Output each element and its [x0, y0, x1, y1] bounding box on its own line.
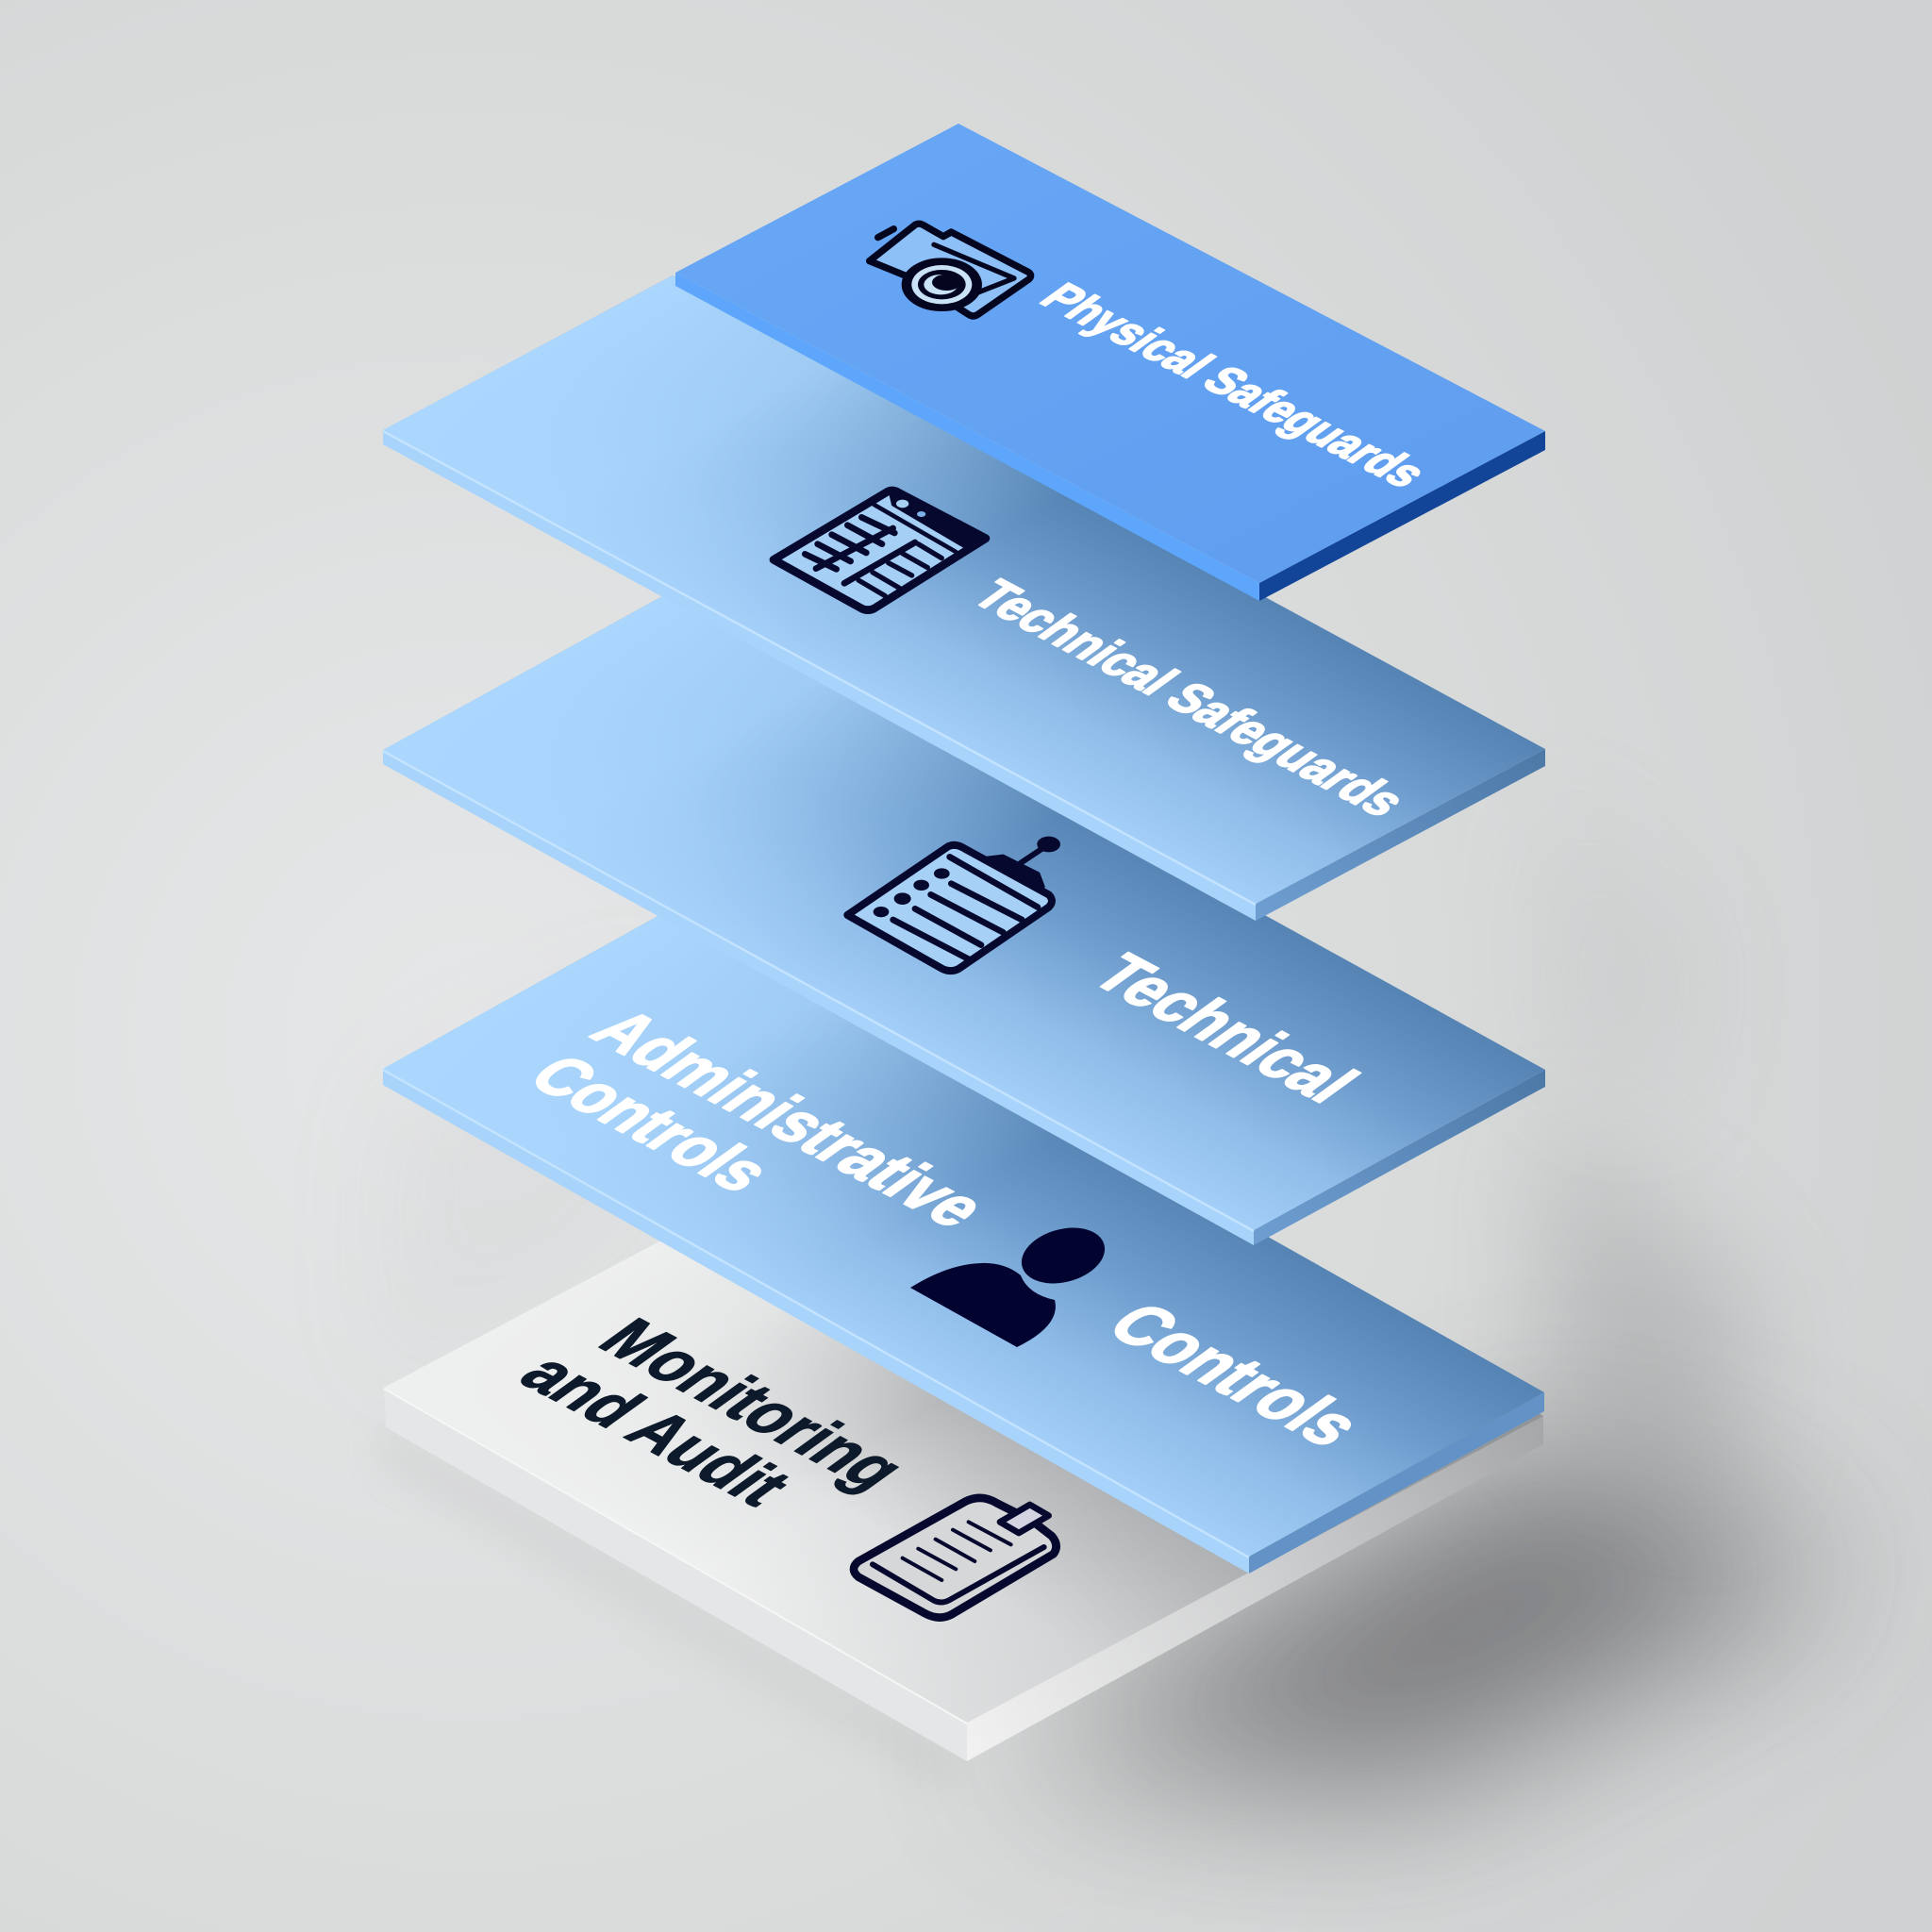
slab right side [1249, 1392, 1544, 1574]
slab edge highlight [383, 751, 1254, 1231]
layer: Administrative Controls [383, 905, 1544, 1574]
controls label right: Controls [1091, 1291, 1379, 1457]
slab right side [967, 1415, 1543, 1761]
slab left side [675, 273, 1259, 601]
slab left side [383, 430, 1256, 921]
slab top left light [383, 275, 1545, 904]
slab top left light [384, 1081, 1543, 1723]
slab edge highlight [383, 431, 1256, 905]
layer: Technical [383, 590, 1545, 1245]
slab left side [383, 750, 1254, 1245]
layer: Monitoring and Audit [384, 1081, 1543, 1761]
slab top left light [383, 590, 1545, 1230]
slab top face [675, 124, 1545, 583]
slab top face [383, 590, 1545, 1230]
cast shadow of stack [377, 783, 1849, 1792]
slab right side [1259, 431, 1545, 601]
slab top face [383, 275, 1545, 904]
icon: browser window with grid [774, 491, 987, 610]
audit label: and Audit [504, 1342, 808, 1517]
icon: server with antenna [847, 838, 1059, 971]
slab right side [1256, 749, 1545, 921]
slab left side [384, 1388, 967, 1761]
slab top face [384, 1081, 1543, 1723]
icon: clipboard [854, 1498, 1057, 1618]
layer: Technical Safeguards [383, 275, 1545, 921]
slab top left light [383, 905, 1544, 1557]
icon: person [910, 1219, 1111, 1347]
technical label: Technical [1076, 943, 1374, 1113]
monitoring label: Monitoring [583, 1307, 924, 1501]
slab left side [383, 1069, 1249, 1574]
slab top face [383, 905, 1544, 1557]
slab top right shade [384, 1081, 1543, 1723]
slab front edge highlight [384, 1389, 967, 1724]
icon: camera [870, 224, 1031, 316]
technical safeguards label: Technical Safeguards [959, 572, 1420, 825]
controls label left: Controls [513, 1044, 789, 1203]
physical safeguards label: Physical Safeguards [1028, 276, 1439, 495]
slab edge highlight [383, 1070, 1249, 1557]
administrative label: Administrative [575, 998, 1005, 1239]
layer: Physical Safeguards [675, 124, 1545, 601]
slab right side [1254, 1070, 1545, 1245]
